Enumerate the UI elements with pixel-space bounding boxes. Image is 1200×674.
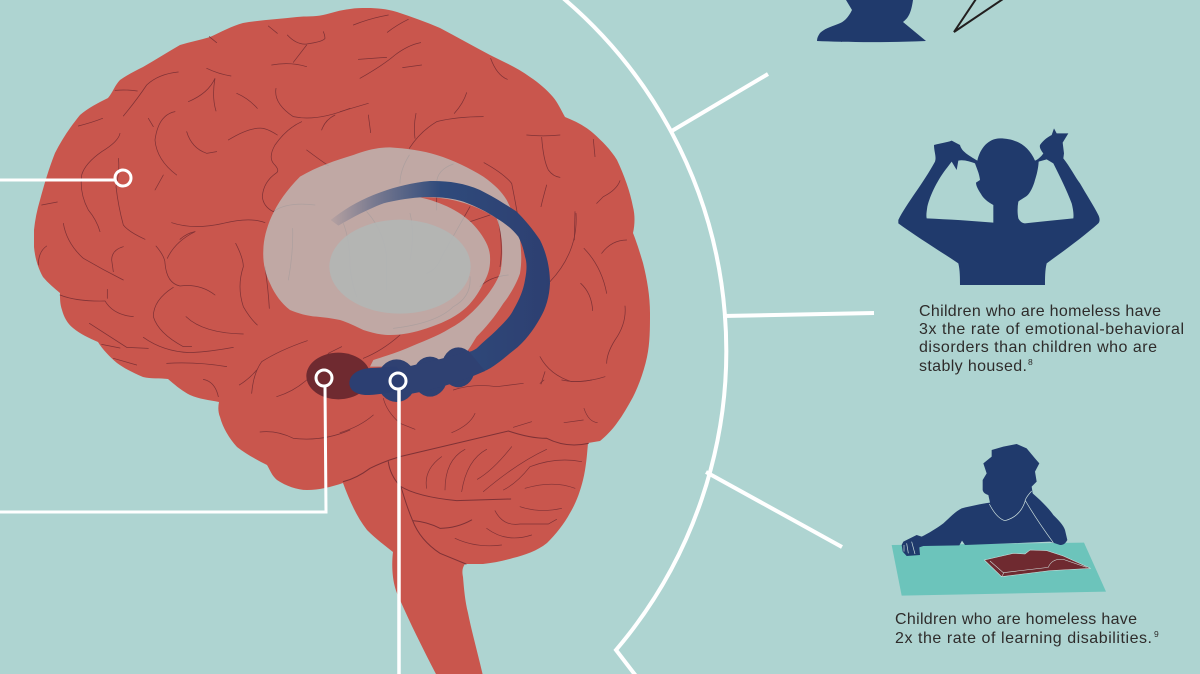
- pointer: amygdala: [0, 370, 332, 512]
- brain silhouette: [34, 8, 650, 674]
- child outline details: [904, 491, 1053, 554]
- table: [892, 543, 1106, 596]
- pointer: cortex: [0, 170, 131, 186]
- text: learning disabilities statistic: Children who are homeless have: [895, 611, 1137, 628]
- brain folds: centre: [273, 155, 508, 358]
- brain folds: cerebellum: [340, 380, 597, 564]
- text: emotional-behavioral disorders statistic: [919, 303, 1184, 375]
- icon: bust silhouette at top: [817, 0, 926, 42]
- text: emotional-behavioral disorders statistic: disorders than children who are: [919, 339, 1157, 356]
- brain folds: right side: [540, 213, 627, 384]
- open book: [984, 550, 1091, 577]
- brain folds: upper left: [42, 26, 350, 239]
- pointer: striatum: [390, 373, 406, 674]
- white arc with spokes: [563, 0, 874, 674]
- pale ellipse: thalamus: [329, 220, 471, 314]
- icon: girl pulling her hair: [898, 128, 1100, 285]
- brain illustration: [34, 8, 650, 674]
- grey crescent: hippocampus region: [263, 147, 521, 367]
- book page lines: [990, 559, 1087, 577]
- blue tube: striatum: [331, 181, 550, 372]
- text: emotional-behavioral disorders statistic: 8: [1028, 357, 1033, 367]
- dark red ellipse: amygdala: [306, 353, 370, 399]
- brain folds: lower left: [38, 223, 350, 439]
- text: emotional-behavioral disorders statistic: Children who are homeless have: [919, 303, 1161, 320]
- text: emotional-behavioral disorders statistic: stably housed.: [919, 358, 1027, 375]
- text: emotional-behavioral disorders statistic: 3x the rate of emotional-behavioral: [919, 321, 1184, 338]
- brain folds: upper right: [340, 15, 620, 240]
- child silhouette: [902, 444, 1067, 556]
- icon: child at table with book: [892, 444, 1106, 596]
- text: learning disabilities statistic: [895, 611, 1159, 647]
- limbic structures: [263, 147, 550, 402]
- icon: paper plane: [954, 0, 1003, 32]
- blue lobes: [349, 347, 485, 402]
- text: learning disabilities statistic: 2x the rate of learning disabilities.: [895, 630, 1152, 647]
- text: learning disabilities statistic: 9: [1154, 629, 1159, 639]
